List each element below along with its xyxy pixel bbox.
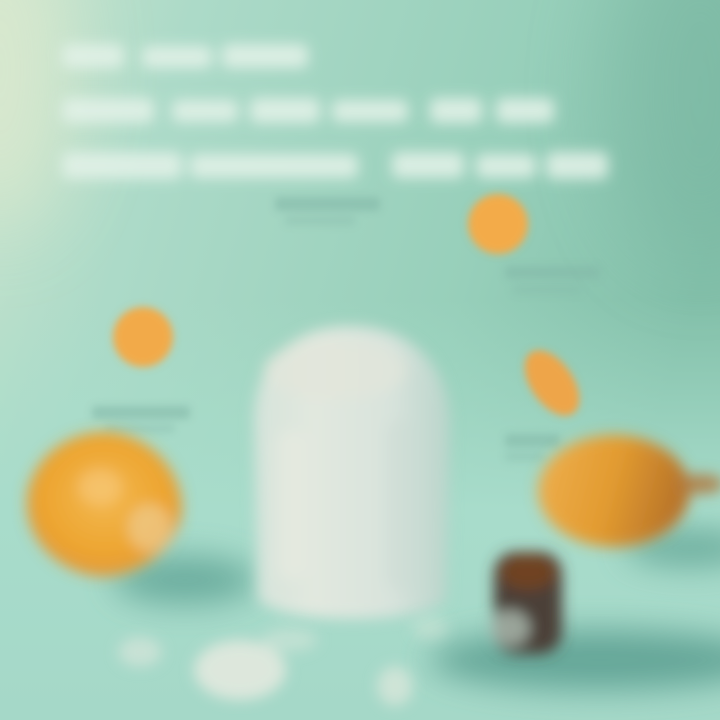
floor shadows — [113, 530, 720, 690]
icon: orange circle left — [113, 307, 173, 367]
icon: orange circle top right — [468, 194, 528, 254]
powder pile — [118, 616, 448, 706]
small caption labels — [92, 197, 600, 461]
dark bottle — [490, 552, 562, 654]
right orange fruit — [538, 435, 720, 547]
white powder jar — [254, 326, 450, 619]
left orange fruit — [27, 432, 182, 576]
icon: orange slice right — [514, 341, 590, 425]
title — [62, 44, 608, 179]
